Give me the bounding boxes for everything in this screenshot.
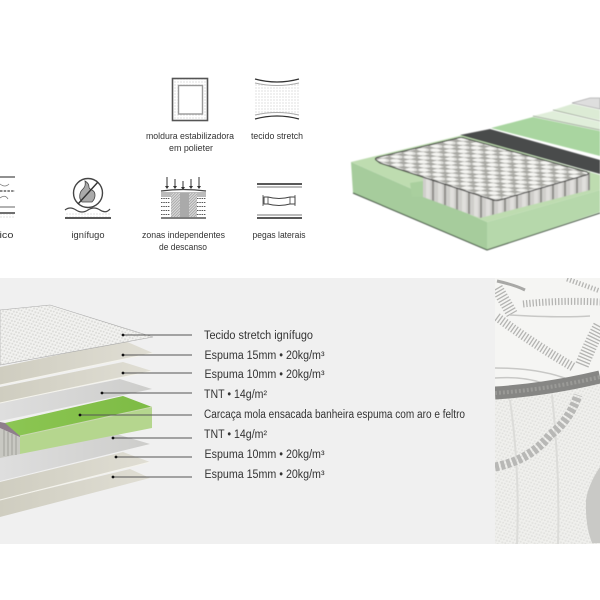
lower knit fabric: [495, 380, 600, 544]
layer labels: Espuma 15mm • 20kg/m³: [204, 350, 325, 362]
spring top honeycomb: [375, 138, 588, 200]
green foam side: [20, 407, 152, 454]
illustration: mattress cutaway: [351, 98, 600, 250]
layer labels: [204, 330, 465, 481]
icon: ignifugo: [65, 178, 111, 218]
leader lines: [79, 334, 192, 478]
green foam upper: [491, 117, 600, 156]
pale layer one: [533, 111, 600, 130]
label: em polieter: em polieter: [169, 143, 213, 153]
green foam top: [5, 396, 152, 436]
layer labels: Carcaça mola ensacada banheira espuma com aro e feltro: [204, 409, 465, 421]
illustration: exploded layers: [0, 305, 153, 517]
layer: TNT bottom: [0, 433, 150, 481]
dark base edge: [353, 193, 600, 250]
green foam tray front right: [487, 190, 600, 250]
label: pegas laterais: pegas laterais: [252, 230, 306, 240]
upper quilted fabric: [495, 278, 600, 393]
panel: grey layers band: [0, 278, 495, 544]
green foam tray side: [351, 162, 487, 250]
green foam tray top: [351, 135, 600, 222]
layer labels: Espuma 15mm • 20kg/m³: [204, 469, 325, 481]
layer labels: Espuma 10mm • 20kg/m³: [204, 369, 325, 381]
stripe bands: [497, 279, 600, 367]
label: ignifugo: ignífugo: [72, 230, 104, 240]
cavity notch: [410, 181, 423, 197]
quilt folds: [495, 315, 590, 384]
label: zonas independentes: zonas independentes: [142, 230, 225, 240]
layer labels: TNT • 14g/m²: [204, 389, 267, 401]
label: moldura estabilizadora: moldura estabilizadora: [146, 131, 234, 141]
layer: foam 15mm top: [0, 341, 153, 385]
pale layer two: [553, 104, 600, 120]
layer: foam 10mm top: [0, 362, 152, 403]
icon: tecido stretch: [255, 79, 299, 119]
knit curve motif: [495, 395, 578, 467]
layer: foam 15mm bottom: [0, 469, 150, 517]
label: de descanso: de descanso: [159, 242, 207, 252]
layer: stretch fabric: [0, 305, 153, 365]
felt edge: [0, 422, 33, 437]
knit blotch motif: [586, 467, 600, 543]
piping cord: [495, 377, 600, 393]
icon: zonas independentes: [161, 177, 206, 218]
photo: fabric detail: [495, 278, 600, 544]
spring unit edge: [0, 425, 20, 458]
icon: moldura estabilizadora: [172, 78, 208, 120]
label: tecido stretch: tecido stretch: [251, 131, 303, 141]
layer labels: Espuma 10mm • 20kg/m³: [204, 449, 325, 461]
dark felt layer: [460, 129, 600, 174]
faint vertical panels: [510, 395, 558, 544]
layer: foam 10mm bottom: [0, 452, 150, 500]
spring front coils: [480, 172, 590, 218]
icon: pegas laterais: [257, 184, 302, 218]
icon: cropped thermal layer: [0, 177, 15, 219]
top fabric sliver: [572, 98, 600, 109]
layer labels: TNT • 14g/m²: [204, 429, 267, 441]
layer labels: Tecido stretch ignífugo: [204, 330, 313, 342]
spring side coils: [423, 177, 497, 218]
layer: TNT top: [0, 379, 152, 421]
